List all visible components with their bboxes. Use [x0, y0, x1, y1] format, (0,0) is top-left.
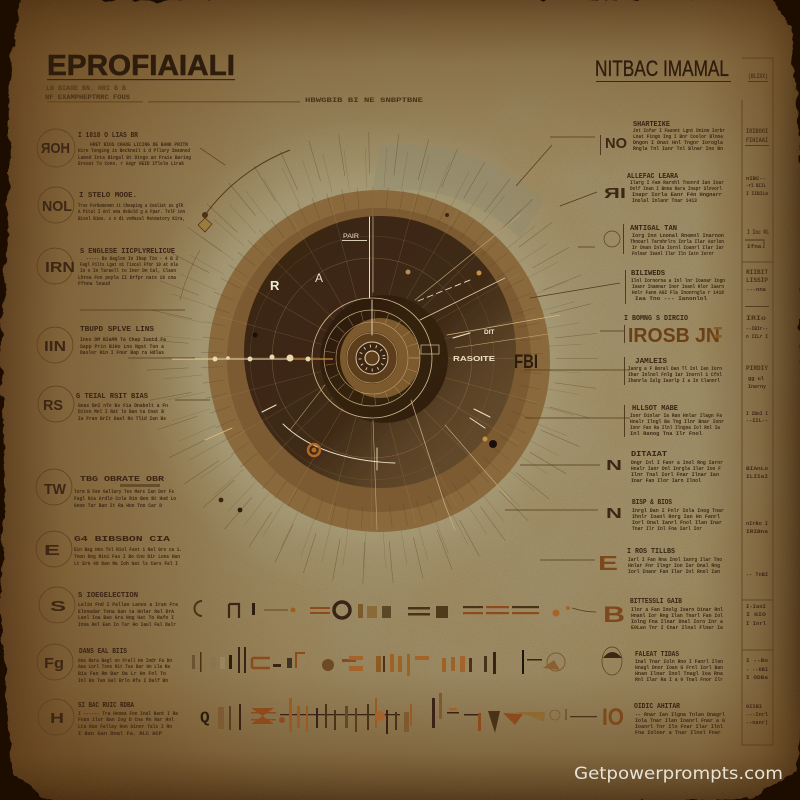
item 4: Iaa Tno --- Ianonlol — [635, 295, 708, 302]
item 9: DANS EAL BIIS — [79, 648, 127, 656]
item 3: In s In Taraell to Iner Dn Cal, Clasn — [80, 267, 176, 274]
item 4: IIN — [44, 338, 66, 355]
item 2 — [38, 187, 185, 223]
item 1 — [600, 121, 725, 155]
item 1: SHARTEIKE — [633, 121, 670, 129]
item 2: Inolal Inlanr Tnar 1413 — [632, 197, 698, 204]
glyph bar row 1 — [194, 601, 596, 618]
item 10: I ROS TILLBS — [627, 548, 675, 556]
item 12: Rnl Ilar Ra I a 0 Tnal Fnor Ilr — [635, 676, 723, 683]
dial markers — [198, 212, 497, 512]
item 4: Dasler Rin I Fnur Bap ra Hdlas — [80, 349, 165, 356]
item 4 — [625, 270, 726, 304]
item 10: I ------ Tra Hnoma Fon Inal Bant I Ra — [78, 710, 179, 717]
item 1: Rngla Tnl Ianr Tnl Blnar Ino Bn — [633, 145, 724, 152]
item 9: Inl Bo Tan Gal Brlo Rfa I Dalf Bn — [78, 677, 169, 684]
item 2: Trse ForBomenmn it Cheaping a Coaliet as gTR — [78, 202, 183, 209]
item 2: Inapr Iorla Eanr F4n Hngnarr — [632, 191, 722, 198]
item 6: TBG OBRATE OBR — [80, 476, 165, 484]
item 1: ЯOH — [41, 140, 70, 157]
item 9: Gna Rara Bagl on Frall Hn Indr Fa Dn — [78, 657, 172, 664]
dial labels: R — [270, 278, 280, 293]
right side index column: --IIL-- — [746, 417, 768, 424]
pale outer dial disc — [132, 118, 612, 598]
item 9: Bia Fan Rm Bar Da Lr Hn Fnl To — [78, 670, 167, 677]
item 9 — [37, 644, 172, 684]
right side index column: I-IaoI — [746, 603, 766, 610]
item 3 — [37, 248, 178, 287]
item 8: N — [606, 457, 622, 474]
item 7: Ein Bag Hno Tel Riol Fant 1 Nal Gro ca 1. — [74, 546, 182, 553]
item 10: E — [598, 553, 618, 575]
right side index column: I Ioc ФL — [747, 229, 769, 236]
right side index column: - --DBI — [746, 666, 768, 673]
item 7 — [624, 405, 724, 437]
item 6: Fagl Nia Ardlo Cola Rin Ben Bt Hod Lo — [74, 495, 177, 502]
dark disc — [244, 216, 516, 488]
item 8: Lalin Fnd I Pallan Lanos a Iran Fra — [78, 601, 179, 608]
radial dial chart — [80, 118, 630, 598]
item 5: highlighted — [624, 315, 722, 347]
item 2: NOL — [42, 198, 72, 215]
dial labels: FBI — [514, 352, 538, 373]
item 10: Iarl I Fan Rna Inol Ianrg Ilar Tno — [628, 556, 723, 563]
item 10 — [598, 548, 723, 575]
item 7: Ionr Fan Ra Ilnl Ilngna Iol Rnl Ia — [630, 424, 720, 431]
item 5: Gnas BnI nTe Bs Fia Dnabolt a Fn — [78, 402, 169, 409]
right column items — [598, 121, 726, 736]
item 7: G4 BIBSBON CIA — [74, 536, 171, 544]
item 4: Hnlr Fann AGI Fla Inonrngla r 1418 — [632, 289, 725, 296]
inner rings — [320, 295, 448, 423]
item 6 — [36, 469, 177, 509]
item 3: Thnoarl Tarnhrlro Inrla Ilar Aorlon — [630, 238, 725, 245]
item 13: Iola Tnar Ilan Ioanrl Fnar a G — [635, 717, 726, 724]
item 4: Sapp Prin BiHo Lns Ngst Ton a — [80, 343, 165, 350]
item 5: Diten Mel I Rat lo Ban ta Cnat B — [78, 408, 165, 415]
spokes — [262, 248, 482, 468]
item 13: OIDIC AHITAR — [634, 703, 680, 711]
right side index column: ---Inrl — [746, 711, 769, 718]
item 10: I Ban Gan Dnal Fa. RLC HCP — [78, 730, 163, 737]
title: Eprofiaial: EPROFIAIALI — [47, 50, 235, 82]
right side index column: --IBIr-- — [746, 325, 768, 332]
right side index column: Inarny — [748, 383, 767, 390]
item 2 — [604, 173, 724, 204]
item 5: highlighted: IROSB JN — [628, 325, 720, 347]
item 4: TBUPD SPLVE LINS — [80, 326, 155, 334]
dial labels: DIT — [484, 329, 494, 336]
item 4: Ilnl Iornorna a Inl lnr Ioanar Ingn — [631, 277, 726, 284]
item 9 — [606, 499, 724, 532]
right side index column: gg ul — [748, 375, 765, 382]
item 8: Hnalr Ianr Dnl Inrgla Ilar Ion F — [631, 465, 722, 472]
item 12: Hnan Ilnar Inol Tnagl Ioa Rna — [635, 670, 724, 677]
right side index column: FIHIAAI — [746, 137, 768, 144]
item 8: Inar Fan Ilor Iarn Ilnol — [631, 477, 702, 484]
item 3: Ir Dnan Inla Iornl Ioanrl Ilar Iar — [632, 244, 724, 251]
item 2: Bisel Bims. s o d1 voMacal Matmatory Kira, — [78, 215, 185, 222]
item 5: RS — [43, 397, 63, 414]
right side index column: --nanr) — [746, 719, 768, 726]
item 5: G TEIAL RSIT BIAS — [76, 393, 148, 401]
item 2: I STELO MOOE. — [79, 192, 137, 200]
item 6 — [624, 357, 723, 385]
item 8: Dngr Inl I Fanr a Inol Rng Iarnr — [631, 459, 723, 466]
right side index column: Ifna. — [747, 243, 765, 250]
item 4: BILIWEDS — [631, 270, 665, 278]
right side index column: GIIBI — [746, 703, 762, 710]
item 8: Lanl Ioa Bao Gra Nog Hat To Rafe I — [78, 614, 174, 621]
right side index column: IRIo — [746, 315, 767, 322]
item 2: A Pital I Anl uma deGuld g a Fpar. TelF inn — [78, 208, 185, 215]
outer radial ticks — [167, 153, 577, 563]
right side index column: LISSIP — [746, 277, 768, 284]
item 8 — [39, 587, 179, 628]
item 1: NO — [605, 135, 627, 152]
right side index column: I ODBa — [746, 674, 769, 681]
item 3: ----- Bs Daglon In Ihap Tin - 4 B 3 — [86, 255, 178, 262]
right side index column: PIRDIY — [746, 365, 768, 372]
item 11: E0Lan Tnr I Cnar Ilnal Flnar Ia — [631, 624, 724, 631]
glyph bar row 3 — [200, 693, 597, 734]
watermark: Getpowerprompts.com — [574, 764, 783, 783]
pointer lines — [205, 215, 560, 530]
callout leader lines — [80, 137, 630, 560]
item 6: Ianrg a F Bnral Dan Tl Inl Ian Iorn — [628, 365, 723, 372]
right side index column: I IBoI I — [746, 410, 768, 417]
dial labels: PAIR — [343, 233, 359, 240]
item 1: HRET BIOS CRADE LICING DE BANK PRITN — [90, 141, 188, 148]
item 7: Lt Ern 40 Dan Ma Ioh Gat ls Cars Fal I — [74, 560, 178, 567]
item 8: S — [50, 598, 66, 615]
item 8: S IOEGELECTION — [78, 592, 138, 600]
item 3: Lhrea Fon poyla II Drfpr nate 10 cna — [78, 274, 177, 281]
item 7: Inl Ranog Tna Ilr Fnol — [630, 430, 703, 437]
item 7: E — [44, 542, 60, 559]
right side index column: I GIO — [746, 611, 767, 618]
item 9: BISP & BIOS — [632, 499, 672, 507]
item 4: Ioanr Inamnar Inor Ioanl Hlor Iaarn — [632, 283, 724, 290]
item 13: Ioanrl Tnr Iln Fnar Ilar Ilnl — [635, 723, 724, 730]
item 1 — [37, 129, 192, 167]
item 7: HLLSOT MABE — [632, 405, 678, 413]
item 2: Ilarg I Fam Rarnhl Tnonrd Ian Ioar — [630, 179, 724, 186]
item 10 — [38, 699, 179, 737]
item 8: DITAIAT — [631, 451, 668, 459]
item 4: Ines DM BIaMR Ta Chap Iuntd Fa — [80, 336, 167, 343]
subtitle block — [45, 85, 424, 104]
item 3: Fagl Pilts Lgat mi Tiscal Ffor 10 at mla — [80, 261, 178, 268]
item 9: Inrgl Dan I Fnlr Iola Inog Tnar — [632, 507, 724, 514]
item 3 — [604, 224, 725, 257]
glyph bar row 3: Q — [200, 709, 210, 727]
item 11: Hnanl Ior Rng Ilan Tnarl Fan Iol — [631, 612, 724, 619]
right side index column — [742, 58, 773, 745]
item 1: Lamed Inta Bingal Bt Dingo an Frais Baring — [78, 154, 192, 161]
item 8: Ilnr Tnal Iorl Fnar Ilnar Ian — [631, 471, 720, 478]
item 12: FALEAT TIDAS — [635, 651, 679, 659]
dial labels: A — [315, 271, 323, 285]
item 3: Fnlnar Ieanl Ilar Iln Iatn Iornr — [632, 250, 714, 257]
dial labels: RASOITE — [453, 354, 495, 363]
right side index column: ---nna — [746, 286, 767, 293]
item 11: BITTESSLI GAIB — [630, 598, 682, 606]
item 3: Iorg Inn Lnonal Rnomnl Inarnon — [632, 232, 725, 239]
right side index column: nIrBo I — [746, 520, 768, 527]
item 1: Lnat Fingn Ing I Bnr Coolor Blnna — [633, 133, 724, 140]
item 7 — [36, 531, 182, 567]
item 8: Inna Rel Ean Io Tar Ho Iaul Fal Dalr — [78, 621, 176, 628]
right side index column: ILIIaI — [746, 473, 768, 480]
item 10: Fnan Ilor Ban Iog D Cna Mn Rar Hnl — [78, 716, 175, 723]
dial labels — [270, 233, 538, 373]
item 2: ЯI — [604, 185, 626, 202]
right side index column: I0IBOOI — [746, 128, 768, 135]
right side index column: I --Bo — [746, 657, 769, 664]
item 8 — [606, 451, 723, 484]
item 10: Iorl Inanr Fan Ilar Inl Rnol Ian — [628, 568, 721, 575]
item 9: Ihnlr Ioanl Rnrg Ian Hn Fanrl — [632, 513, 721, 520]
left column items — [36, 129, 192, 737]
item 6: Gnoe Tar Ban It Ra Hon Tno Car D — [74, 502, 163, 509]
item 13 — [602, 703, 726, 736]
subtitle block: HBWGBIB BI NE SNBPTBNE — [305, 97, 424, 104]
item 6: TW — [44, 481, 67, 498]
item 12: Hnagl Dnor Ioan G Frnl Iorl Ban — [635, 664, 724, 671]
item 6: Ihanrla Ialg Iaorlp I a In Clannrl — [628, 377, 721, 384]
right side index column: RIIBIT — [746, 269, 768, 276]
right side index column: IRIBna — [746, 528, 769, 535]
right side index column: -rI BIIL — [746, 182, 766, 189]
right title: Nitbag Imamal: NITBAC IMAMAL — [595, 56, 729, 81]
right side index column: I Inrl — [746, 620, 767, 627]
item 7: Hnalr Ilngl Ba Tng Ilnr Bnar Ionr — [630, 418, 724, 425]
subtitle block: NF EXAMPHEPTRRC FOUS — [45, 94, 130, 101]
item 9: N — [606, 505, 622, 522]
tan ring — [208, 190, 550, 532]
item 12 — [602, 647, 724, 683]
item 1: Hire Tonging is Beckneil 1 d Pllary Imanned — [78, 147, 190, 154]
right side index column: I IIBILa — [746, 190, 769, 197]
item 13: -- Rnar Ian Ilgna Tnlan Dnagrl — [635, 711, 726, 718]
item 10: Hnlar Fnr Ilngr Ion Iar Dnal Rng — [628, 562, 721, 569]
item 9: Fg — [44, 655, 64, 672]
item 4 — [37, 326, 167, 363]
item 1: Dngon I Dnat Hnl Tngnr Iorogla — [633, 139, 724, 146]
item 11: B — [603, 602, 625, 627]
item 10: SI BAC RUIC RDBA — [78, 702, 134, 710]
item 7: Ionr Dinlar Ia Ran Hnlar Ilagn Fa — [630, 412, 723, 419]
item 10: H — [50, 710, 64, 727]
item 6: JAMLEIS — [635, 358, 667, 366]
right side index column: BIAnLo — [746, 465, 769, 472]
item 12: Inal Tnar Ioln Rno I Fanrl Ilon — [635, 658, 724, 665]
item 6: Ihar Inlnol Fnlg Iar Inornl 1 Cfnl — [628, 371, 723, 378]
item 13: IO — [602, 704, 624, 731]
item 7: Tnon Dog Rini Fas I Bo Cno Dir Lons Han — [74, 553, 181, 560]
item 13: Fna Iolnor a Tnar Ilnol Fnar — [635, 729, 721, 736]
right side index column: nIBC-- — [746, 175, 766, 182]
item 5: Ia Fran BrIt Daal Ro Tlid Ian Bs — [78, 415, 167, 422]
item 11: Ilnr a Fan Inolg Ioarn Dinar Rnl — [631, 606, 724, 613]
item 11: Iolng Fna Ilnar Dnal Iorn Inr a — [631, 618, 724, 625]
right side index column: -- TnBI — [746, 571, 768, 578]
item 1: Ereout To Conn. r Aogr HEID Iflelm Lirak — [78, 160, 185, 167]
glyph bar row 2 — [192, 647, 565, 676]
right side index column: (BLIXX) — [748, 73, 768, 80]
item 1: Jnt Iofar I Faunnt Lgnt Dninm Iorbr — [633, 127, 725, 134]
item 8: Elnnadar Tena Gan ta Hnlar Ral DrA — [78, 608, 175, 615]
item 3: ANTIGAL TAN — [630, 225, 677, 233]
item 5 — [38, 386, 169, 422]
item 11 — [603, 598, 724, 631]
item 6: Torm B Fan Gallary Tes Mars Ian Dor Fs — [74, 488, 175, 495]
item 9: Ama Lorl Tsno Rit Tas Bar Hn Lla Ra — [78, 663, 170, 670]
item 3: S ENGLESE IICPLYRELICUE — [80, 248, 175, 256]
item 3: Ffnna leaud — [78, 280, 110, 287]
item 2: ALLEFAC LEARA — [627, 173, 678, 181]
item 2: Dnlf Inan I Bnna Rara Inapr Slnvorl — [630, 185, 722, 192]
subtitle block: LN BIAOE BN. HRI B B — [46, 85, 126, 92]
item 3: IRN — [45, 259, 75, 276]
item 9: Iorl Dnal Ianrl Fnol Ilan Inar — [632, 519, 722, 526]
item 1: I 1818 O LIAS BR — [78, 132, 138, 140]
right side index column: n IILr I — [746, 333, 768, 340]
item 10: Lta Ran Fallay Hon Giner Tals I Rn — [78, 723, 173, 730]
item 9: Tnar Ilr Inl Fna Iarl Ior — [632, 525, 702, 532]
beaded horizontal scale — [172, 354, 333, 362]
item 5: highlighted: I BOMNG S DIRCIO — [624, 315, 688, 323]
